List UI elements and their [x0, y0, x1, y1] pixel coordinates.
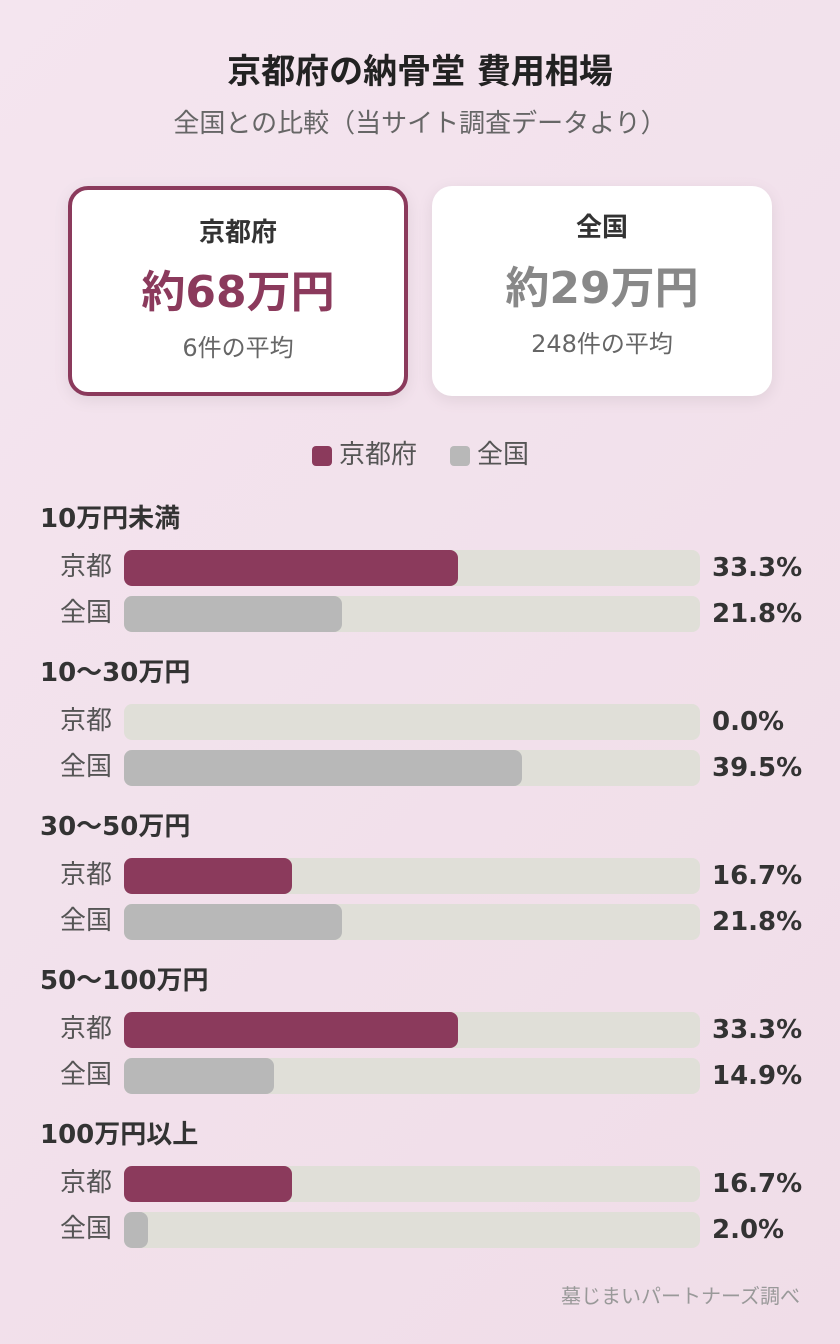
value national: 39.5% [712, 753, 802, 783]
legend swatch: national [450, 446, 470, 466]
value Kyoto: 16.7% [712, 861, 802, 891]
bar Kyoto 0.0% [124, 704, 700, 740]
card value: national: 約29万円 [505, 263, 699, 314]
value Kyoto: 16.7% [712, 1169, 802, 1199]
bar national 21.8% [124, 904, 700, 940]
bar national 39.5% [124, 750, 700, 786]
title: 京都府の納骨堂 費用相場 [227, 52, 613, 92]
value Kyoto: 33.3% [712, 553, 802, 583]
legend [312, 440, 529, 470]
label Kyoto: 京都 [60, 552, 112, 582]
panel: national card [432, 186, 772, 396]
label national: 全国 [60, 1214, 112, 1244]
legend label: national: 全国 [477, 440, 529, 470]
card value: Kyoto: 約68万円 [141, 267, 335, 318]
source note: 墓じまいパートナーズ調べ [561, 1284, 800, 1308]
panel: 100k-300k yen [40, 658, 802, 786]
label national: 全国 [60, 752, 112, 782]
value Kyoto: 0.0% [712, 707, 784, 737]
panel: under 100k yen [40, 504, 802, 632]
group heading: 30～50万円 [40, 812, 190, 842]
bar national 14.9% [124, 1058, 700, 1094]
value national: 14.9% [712, 1061, 802, 1091]
group heading: 10～30万円 [40, 658, 190, 688]
bar Kyoto 16.7% [124, 858, 700, 894]
bar Kyoto 33.3% [124, 550, 700, 586]
panel: over 1M yen [40, 1120, 802, 1248]
legend swatch: Kyoto [312, 446, 332, 466]
card heading: national: 全国 [576, 213, 628, 243]
legend label: Kyoto: 京都府 [339, 440, 417, 470]
value national: 21.8% [712, 907, 802, 937]
panel: 500k-1M yen [40, 966, 802, 1094]
group heading: 50～100万円 [40, 966, 208, 996]
label national: 全国 [60, 1060, 112, 1090]
value national: 2.0% [712, 1215, 784, 1245]
card note: Kyoto: 6件の平均 [182, 334, 294, 362]
bar national 2.0% [124, 1212, 700, 1248]
label national: 全国 [60, 906, 112, 936]
value national: 21.8% [712, 599, 802, 629]
card note: national: 248件の平均 [531, 330, 673, 358]
panel: Kyoto card [68, 186, 408, 396]
label Kyoto: 京都 [60, 1014, 112, 1044]
card heading: Kyoto: 京都府 [199, 218, 277, 248]
group heading: 10万円未満 [40, 504, 180, 534]
label Kyoto: 京都 [60, 706, 112, 736]
value Kyoto: 33.3% [712, 1015, 802, 1045]
panel: 300k-500k yen [40, 812, 802, 940]
bar Kyoto 33.3% [124, 1012, 700, 1048]
bar Kyoto 16.7% [124, 1166, 700, 1202]
label Kyoto: 京都 [60, 860, 112, 890]
label Kyoto: 京都 [60, 1168, 112, 1198]
subtitle: 全国との比較（当サイト調査データより） [173, 109, 667, 139]
group heading: 100万円以上 [40, 1120, 198, 1150]
bar national 21.8% [124, 596, 700, 632]
label national: 全国 [60, 598, 112, 628]
